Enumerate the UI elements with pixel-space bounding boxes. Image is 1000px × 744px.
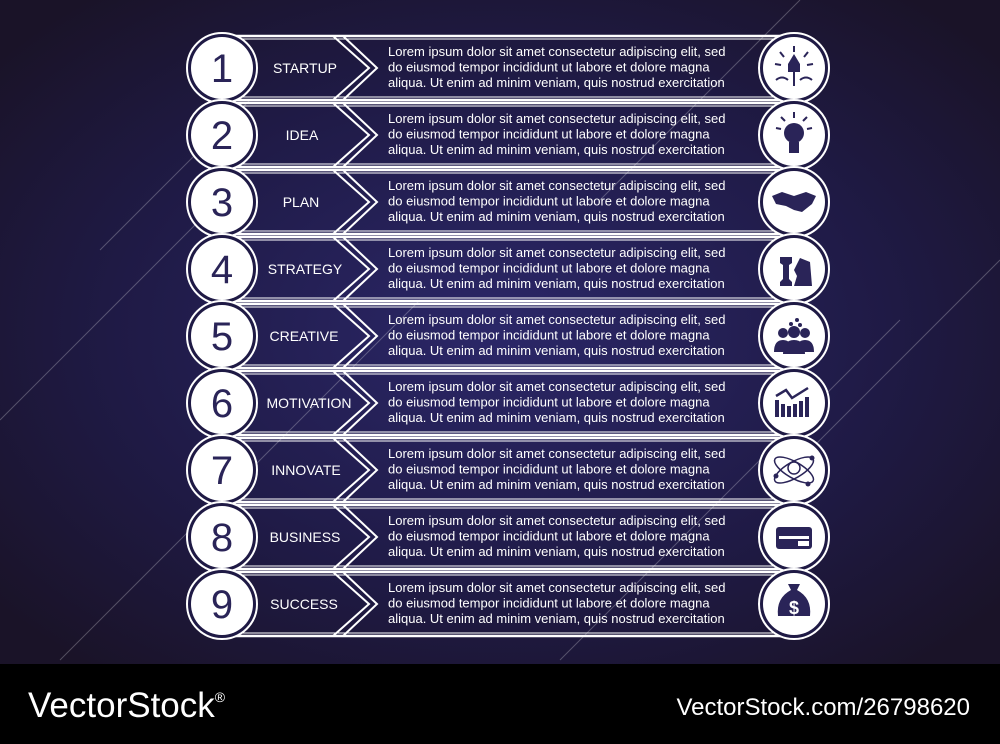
circle 3: 3: [211, 181, 233, 225]
text 1: Lorem ipsum dolor sit amet consectetur adipiscing elit, sed: [388, 44, 725, 59]
text 9: do eiusmod tempor incididunt ut labore et dolore magna: [388, 596, 710, 610]
row 6: [236, 371, 784, 435]
text 5: Lorem ipsum dolor sit amet consectetur adipiscing elit, sed: [388, 312, 725, 327]
row 9: [236, 572, 784, 636]
text 6: Lorem ipsum dolor sit amet consectetur adipiscing elit, sed: [388, 379, 725, 394]
row 8: [236, 505, 784, 569]
text 6: do eiusmod tempor incididunt ut labore et dolore magna: [388, 394, 710, 410]
circle 7: [187, 435, 257, 505]
step labels: PLAN: [283, 194, 319, 210]
text 6: aliqua. Ut enim ad minim veniam, quis nostrud exercitation: [388, 410, 725, 425]
step labels: BUSINESS: [270, 529, 340, 545]
text 3: Lorem ipsum dolor sit amet consectetur adipiscing elit, sed: [388, 178, 725, 193]
text 2: aliqua. Ut enim ad minim veniam, quis nostrud exercitation: [388, 142, 725, 157]
circle 8: 8: [211, 516, 233, 560]
text 4: aliqua. Ut enim ad minim veniam, quis nostrud exercitation: [388, 276, 725, 291]
circle 1: 1: [211, 47, 233, 91]
text 5: aliqua. Ut enim ad minim veniam, quis nostrud exercitation: [388, 343, 725, 358]
text 3: aliqua. Ut enim ad minim veniam, quis nostrud exercitation: [388, 209, 725, 224]
circle 8: [187, 502, 257, 572]
step labels: MOTIVATION: [266, 395, 352, 411]
icon: chart: [759, 368, 829, 438]
text 3: do eiusmod tempor incididunt ut labore et dolore magna: [388, 194, 710, 208]
circle 9: [187, 569, 257, 639]
circle 6: [187, 368, 257, 438]
step labels: [266, 60, 352, 612]
icon: chess: [759, 234, 829, 304]
circle 1: [187, 33, 257, 103]
step labels: SUCCESS: [270, 596, 338, 612]
icon: team: [759, 301, 829, 371]
icon: money bag: [759, 569, 829, 639]
text 7: do eiusmod tempor incididunt ut labore et dolore magna: [388, 462, 710, 476]
rows: [236, 36, 784, 636]
text 4: Lorem ipsum dolor sit amet consectetur adipiscing elit, sed: [388, 245, 725, 260]
text 9: Lorem ipsum dolor sit amet consectetur adipiscing elit, sed: [388, 580, 725, 595]
text 2: do eiusmod tempor incididunt ut labore et dolore magna: [388, 126, 710, 142]
row 2: [236, 103, 784, 167]
circle 2: [187, 100, 257, 170]
text 1: aliqua. Ut enim ad minim veniam, quis nostrud exercitation: [388, 75, 725, 90]
row 3: [236, 170, 784, 234]
circle 2: 2: [211, 114, 233, 158]
circle 4: 4: [211, 248, 233, 292]
row 5: [236, 304, 784, 368]
text 8: aliqua. Ut enim ad minim veniam, quis nostrud exercitation: [388, 544, 725, 559]
circle 7: 7: [211, 449, 233, 493]
circle 9: 9: [211, 583, 233, 627]
icon: handshake: [759, 167, 829, 237]
icon: card: [759, 502, 829, 572]
step labels: IDEA: [286, 127, 319, 143]
text 9: aliqua. Ut enim ad minim veniam, quis nostrud exercitation: [388, 611, 725, 626]
circle 3: [187, 167, 257, 237]
text 7: Lorem ipsum dolor sit amet consectetur adipiscing elit, sed: [388, 446, 725, 461]
text 8: do eiusmod tempor incididunt ut labore et dolore magna: [388, 528, 710, 544]
circle 5: [187, 301, 257, 371]
text 4: do eiusmod tempor incididunt ut labore et dolore magna: [388, 260, 710, 276]
row 7: [236, 438, 784, 502]
text 7: aliqua. Ut enim ad minim veniam, quis nostrud exercitation: [388, 477, 725, 492]
row 4: [236, 237, 784, 301]
step labels: STRATEGY: [268, 261, 343, 277]
icon: lightbulb brain: [759, 100, 829, 170]
icon circles: [759, 33, 829, 639]
step labels: INNOVATE: [271, 462, 341, 478]
text 2: Lorem ipsum dolor sit amet consectetur adipiscing elit, sed: [388, 111, 725, 126]
circle 6: 6: [211, 382, 233, 426]
number circles: [187, 33, 257, 639]
circle 4: [187, 234, 257, 304]
circle 5: 5: [211, 315, 233, 359]
footer bar: ®: [215, 689, 226, 705]
icon: money bag: $: [789, 598, 799, 618]
step labels: CREATIVE: [270, 328, 338, 344]
footer bar: [0, 664, 1000, 744]
icon: rocket sun: [759, 33, 829, 103]
row 1: [236, 36, 784, 100]
step labels: STARTUP: [273, 60, 337, 76]
icon: atom: [759, 435, 829, 505]
footer bar: VectorStock: [28, 686, 215, 725]
text 5: do eiusmod tempor incididunt ut labore et dolore magna: [388, 328, 710, 342]
text 1: do eiusmod tempor incididunt ut labore et dolore magna: [388, 60, 710, 74]
footer bar: VectorStock.com/26798620: [676, 694, 970, 721]
description texts: [388, 44, 725, 626]
text 8: Lorem ipsum dolor sit amet consectetur adipiscing elit, sed: [388, 513, 725, 528]
